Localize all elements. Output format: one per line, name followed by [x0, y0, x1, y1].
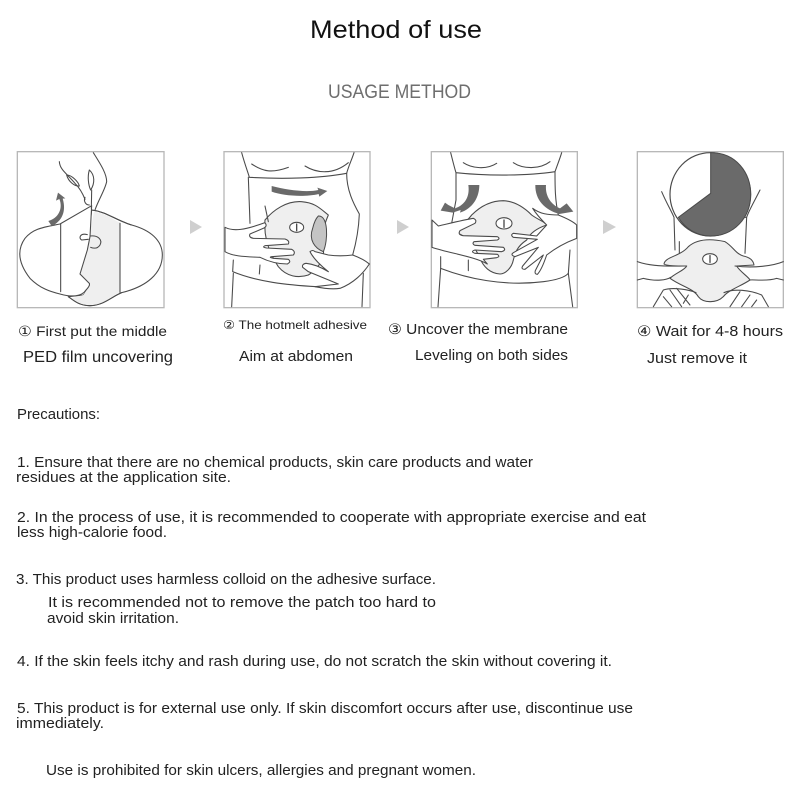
precaution 3: avoid skin irritation. — [47, 611, 179, 627]
precaution 1: residues at the application site. — [16, 470, 231, 486]
panel: step 3 illustration — [431, 152, 577, 308]
step 3 caption — [388, 322, 568, 364]
step 2 caption — [223, 318, 367, 365]
step 2 caption: ② The hotmelt adhesive — [223, 318, 367, 332]
step 4 caption — [637, 324, 783, 367]
arrow: step 3 to 4 — [603, 220, 616, 234]
precaution 2 — [17, 510, 646, 541]
step 4 caption: ④ Wait for 4-8 hours — [637, 324, 783, 340]
panel: step 1 illustration — [17, 152, 164, 308]
precaution 3: It is recommended not to remove the patch too hard to — [48, 595, 436, 611]
precaution 4: 4. If the skin feels itchy and rash during use, do not scratch the skin without covering it. — [17, 654, 612, 670]
subtitle: USAGE METHOD — [328, 82, 471, 103]
arrow: step 2 to 3 — [397, 220, 409, 234]
precaution 2: less high-calorie food. — [17, 525, 167, 541]
title: Method of use — [310, 16, 482, 44]
precautions heading: Precautions: — [17, 407, 100, 423]
step 3 caption: Leveling on both sides — [415, 348, 568, 364]
precaution 1: 1. Ensure that there are no chemical products, skin care products and water — [17, 455, 533, 471]
step 4 caption: Just remove it — [647, 351, 747, 367]
precaution 5: immediately. — [16, 716, 104, 732]
precaution 3 — [16, 572, 436, 627]
step 1 caption: PED film uncovering — [23, 349, 173, 366]
panel: step 4 illustration — [637, 152, 783, 308]
step 2 caption: Aim at abdomen — [239, 349, 353, 365]
step 1 caption: ① First put the middle — [18, 323, 167, 339]
prohibition note: Use is prohibited for skin ulcers, allergies and pregnant women. — [46, 763, 476, 779]
precaution 5: 5. This product is for external use only. If skin discomfort occurs after use, discontinue use — [17, 701, 633, 717]
precaution 3: 3. This product uses harmless colloid on the adhesive surface. — [16, 572, 436, 588]
step 3 caption: ③ Uncover the membrane — [388, 322, 568, 338]
precaution 5 — [16, 701, 633, 732]
step 1 caption — [18, 323, 173, 366]
precaution 2: 2. In the process of use, it is recommended to cooperate with appropriate exercise and eat — [17, 510, 646, 526]
panel: step 2 illustration — [224, 152, 370, 308]
arrow: step 1 to 2 — [190, 220, 202, 234]
precaution 1 — [16, 455, 533, 486]
